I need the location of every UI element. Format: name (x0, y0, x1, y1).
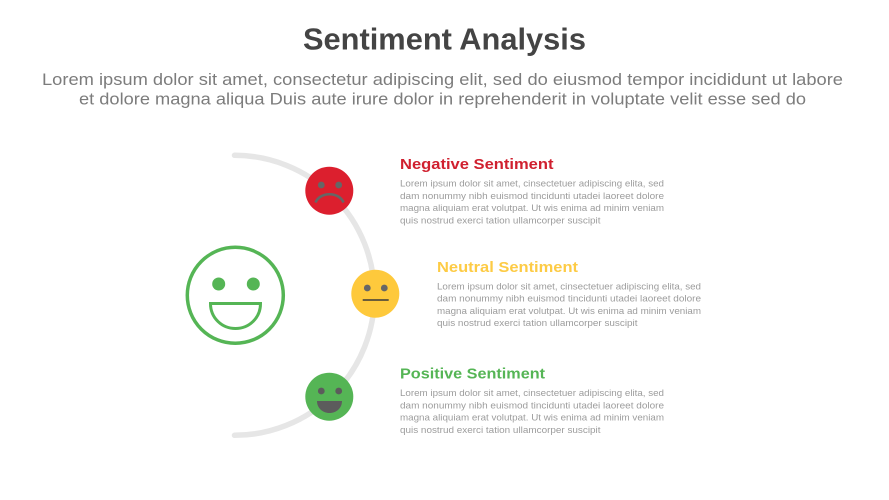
text block: negative description: magna aliquiam erat volutpat. Ut wis enima ad minim veniam (400, 202, 664, 213)
text block: negative description: dam nonummy nibh euismod tincidunti utadei laoreet dolore (400, 190, 664, 201)
panel: positive sentiment (400, 366, 664, 435)
heading: negative sentiment: Negative Sentiment (400, 156, 554, 173)
heading: positive sentiment: Positive Sentiment (400, 366, 545, 382)
panel: neutral sentiment (437, 259, 701, 328)
subtitle text block (42, 71, 843, 108)
text block: neutral description: magna aliquiam erat volutpat. Ut wis enima ad minim veniam (437, 305, 701, 316)
text block: positive description: magna aliquiam erat volutpat. Ut wis enima ad minim veniam (400, 412, 664, 423)
panel: negative sentiment (400, 156, 664, 225)
text block: positive description: quis nostrud exerci tation ullamcorper suscipit (400, 424, 601, 435)
icon: neutral face (351, 270, 399, 318)
text block: negative description (400, 178, 664, 225)
heading: neutral sentiment: Neutral Sentiment (437, 259, 578, 276)
text block: neutral description: Lorem ipsum dolor sit amet, cinsectetuer adipiscing elita, sed (437, 280, 701, 292)
text block: negative description: quis nostrud exerci tation ullamcorper suscipit (400, 214, 601, 225)
subtitle text block: et dolore magna aliqua Duis aute irure dolor in reprehenderit in voluptate velit esse sed do (79, 90, 806, 108)
icon: positive happy face (305, 373, 353, 421)
text block: neutral description: quis nostrud exerci tation ullamcorper suscipit (437, 317, 638, 328)
icon: large outlined smiley (187, 247, 283, 343)
text block: negative description: Lorem ipsum dolor sit amet, cinsectetuer adipiscing elita, sed (400, 178, 664, 189)
text block: positive description (400, 387, 664, 435)
text block: positive description: Lorem ipsum dolor sit amet, cinsectetuer adipiscing elita, sed (400, 387, 664, 398)
text block: positive description: dam nonummy nibh euismod tincidunti utadei laoreet dolore (400, 399, 664, 410)
icon: negative sad face (305, 167, 353, 215)
subtitle text block: Lorem ipsum dolor sit amet, consectetur adipiscing elit, sed do eiusmod tempor incididunt ut labore (42, 71, 843, 89)
text block: neutral description: dam nonummy nibh euismod tincidunti utadei laoreet dolore (437, 293, 701, 304)
title: Sentiment Analysis (303, 22, 586, 56)
semicircular arc connector (234, 155, 374, 435)
text block: neutral description (437, 280, 701, 328)
